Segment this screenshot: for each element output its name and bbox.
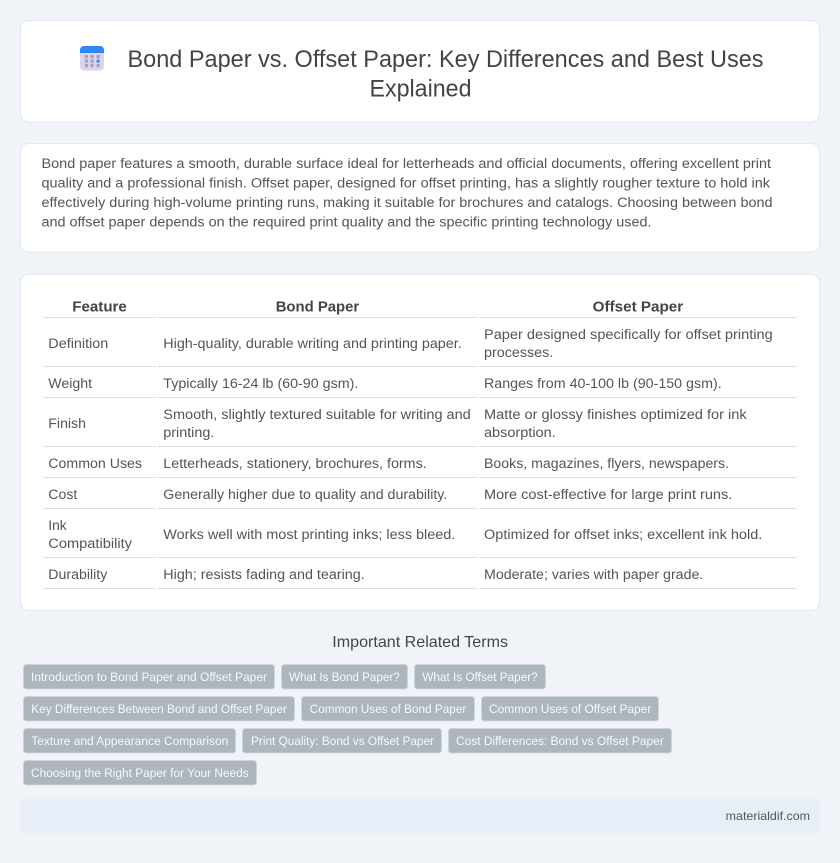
tag — [24, 760, 256, 785]
panel: introduction — [20, 144, 820, 252]
tag: Introduction to Bond Paper and Offset Paper — [31, 670, 267, 684]
tag — [448, 728, 672, 753]
tag — [302, 696, 474, 721]
table header row: Bond Paper — [276, 298, 359, 316]
row: cost — [48, 487, 732, 503]
icon: calendar — [80, 46, 104, 70]
row: common uses: Books, magazines, flyers, newspapers. — [484, 456, 729, 472]
row: common uses: Common Uses — [48, 456, 142, 472]
tag — [24, 696, 294, 721]
row: finish: printing. — [163, 425, 214, 441]
row: cost: Cost — [48, 487, 77, 503]
title: Bond Paper vs. Offset Paper: Key Differences and Best Uses — [128, 46, 764, 73]
panel: comparison table — [20, 274, 820, 610]
tag — [242, 728, 442, 753]
intro text — [42, 156, 773, 230]
table header row: Offset Paper — [593, 298, 683, 316]
tag: What Is Offset Paper? — [422, 670, 538, 684]
tag: What Is Bond Paper? — [289, 670, 400, 684]
related term tags — [24, 664, 672, 785]
heading: important related terms: Important Related Terms — [332, 634, 508, 651]
row: finish: Matte or glossy finishes optimized for ink — [484, 407, 748, 423]
row: weight — [48, 376, 722, 392]
footer — [20, 799, 820, 833]
row: ink compatibility: Optimized for offset inks; excellent ink hold. — [484, 527, 762, 543]
tag — [282, 664, 408, 689]
row: ink compatibility: Compatibility — [48, 536, 133, 552]
row: durability: Durability — [48, 567, 108, 583]
intro text: effectively during high-volume printing runs, making it suitable for brochures and catalogs. Choosing between bond — [42, 195, 773, 211]
row: ink compatibility — [48, 518, 762, 552]
title: Explained — [370, 76, 472, 102]
tag — [414, 664, 546, 689]
tag: Cost Differences: Bond vs Offset Paper — [456, 734, 664, 748]
title — [128, 46, 764, 102]
row: finish: Finish — [48, 416, 86, 432]
row: definition: Definition — [48, 336, 108, 352]
tag — [24, 664, 274, 689]
tag — [482, 696, 658, 721]
row: durability: Moderate; varies with paper grade. — [484, 567, 703, 583]
row: ink compatibility: Works well with most printing inks; less bleed. — [163, 527, 455, 543]
panel: header — [20, 20, 820, 122]
table header row — [72, 298, 683, 316]
row: weight: Weight — [48, 376, 92, 392]
row: definition: processes. — [484, 345, 553, 361]
row: common uses — [48, 456, 729, 472]
tag: Print Quality: Bond vs Offset Paper — [251, 734, 434, 748]
row: cost: Generally higher due to quality and durability. — [163, 487, 447, 503]
row: finish — [48, 407, 748, 441]
row: definition: High-quality, durable writing and printing paper. — [163, 336, 462, 352]
intro text: and offset paper depends on the required print quality and the specific printing technology used. — [42, 214, 652, 230]
tag: Choosing the Right Paper for Your Needs — [31, 766, 249, 780]
intro text: quality and a professional finish. Offset paper, designed for offset printing, has a slightly rougher texture to hold ink — [42, 176, 771, 192]
row: definition: Paper designed specifically for offset printing — [484, 327, 773, 343]
tag: Common Uses of Bond Paper — [310, 702, 466, 716]
row: weight: Typically 16-24 lb (60-90 gsm). — [163, 376, 358, 392]
row: ink compatibility: Ink — [48, 518, 68, 534]
tag: Common Uses of Offset Paper — [489, 702, 651, 716]
row: finish: absorption. — [484, 425, 556, 441]
row: definition — [48, 327, 773, 361]
table header row: Feature — [72, 298, 127, 316]
tag: Texture and Appearance Comparison — [31, 734, 228, 748]
intro text: Bond paper features a smooth, durable surface ideal for letterheads and official documents, offering excellent print — [42, 156, 771, 172]
tag: Key Differences Between Bond and Offset Paper — [31, 702, 287, 716]
row: common uses: Letterheads, stationery, brochures, forms. — [163, 456, 427, 472]
row: weight: Ranges from 40-100 lb (90-150 gsm). — [484, 376, 722, 392]
row: durability: High; resists fading and tearing. — [163, 567, 365, 583]
row: durability — [48, 567, 703, 583]
tag — [24, 728, 236, 753]
row: finish: Smooth, slightly textured suitable for writing and — [163, 407, 471, 423]
footer: materialdif.com — [726, 809, 810, 823]
row: cost: More cost-effective for large print runs. — [484, 487, 732, 503]
